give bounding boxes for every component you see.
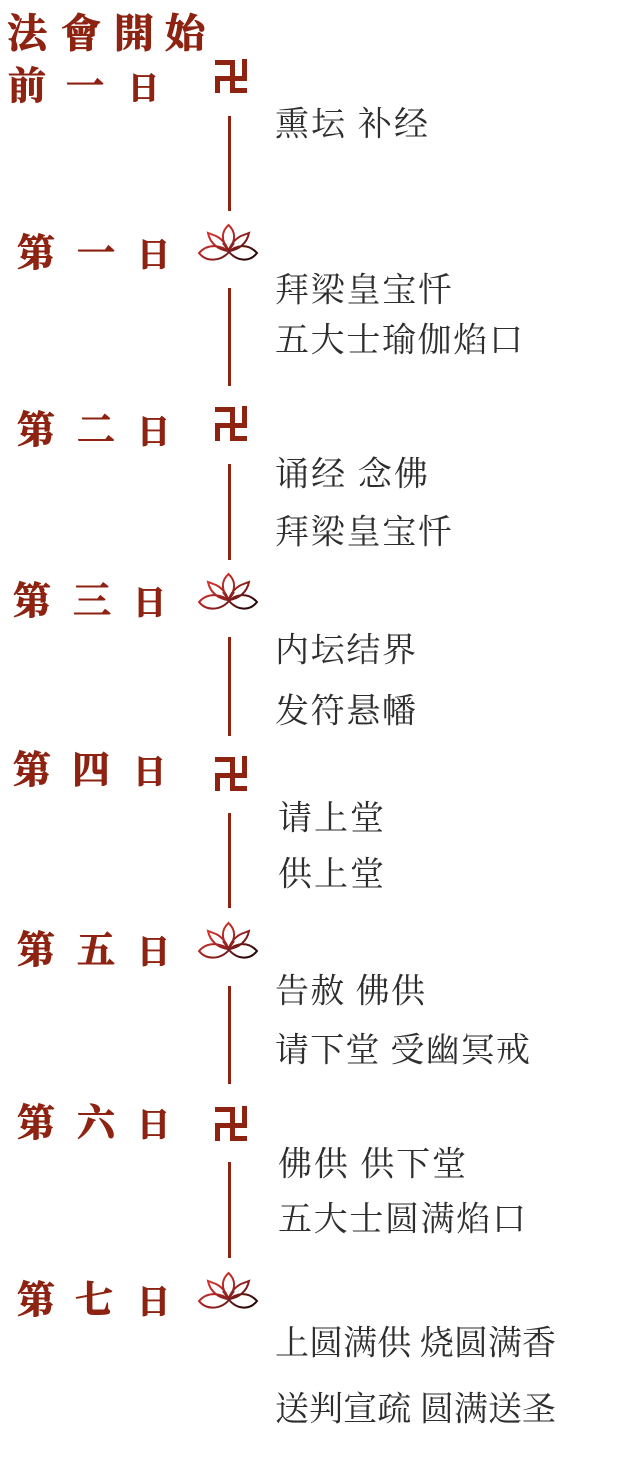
day label: 第一日: 一 — [77, 233, 115, 275]
day label: 第六日: 六 — [77, 1103, 118, 1145]
icon: lotus — [199, 923, 257, 958]
connector line — [228, 637, 231, 736]
day label: 第二日: 二 — [77, 410, 115, 452]
activity: 诵经 念佛: 诵经 念佛 — [275, 456, 428, 494]
activity: 请上堂: 请上堂 — [278, 800, 384, 838]
icon: lotus — [199, 1273, 257, 1308]
day label: 第三日: 日 — [133, 586, 166, 622]
day label: 前一日: 日 — [128, 71, 159, 106]
activity: 佛供 供下堂: 佛供 供下堂 — [278, 1146, 466, 1184]
day label: 第六日: 第 — [17, 1103, 55, 1145]
day label: 第四日: 第 — [13, 750, 51, 792]
connector line — [228, 288, 231, 386]
activity: 五大士瑜伽焰口: 五大士瑜伽焰口 — [275, 322, 523, 360]
icon: swastika — [215, 756, 247, 791]
activity: 发符悬幡: 发符悬幡 — [275, 692, 416, 730]
day label: 第二日: 第 — [17, 410, 55, 452]
day label: 第七日: 日 — [137, 1285, 170, 1321]
activity: 供上堂: 供上堂 — [278, 856, 384, 894]
day label: 第四日: 四 — [72, 750, 110, 792]
connector line — [228, 986, 231, 1084]
day label: 前一日: 一 — [66, 66, 104, 108]
day label: 第一日: 第 — [17, 233, 55, 275]
day label: 第三日: 第 — [13, 581, 51, 623]
activity: 请下堂 受幽冥戒: 请下堂 受幽冥戒 — [275, 1032, 530, 1070]
day label: 第五日: 日 — [137, 935, 170, 971]
day label: 第五日: 第 — [17, 930, 55, 972]
icon: lotus — [199, 225, 257, 260]
day label: 第一日: 日 — [137, 238, 170, 274]
activity: 告赦 佛供: 告赦 佛供 — [275, 972, 426, 1010]
icon: lotus — [199, 574, 257, 609]
connector line — [228, 116, 231, 211]
day label: 第七日: 七 — [75, 1280, 113, 1322]
activity: 五大士圆满焰口: 五大士圆满焰口 — [278, 1200, 526, 1238]
day label: 第二日: 日 — [137, 415, 170, 451]
activity: 送判宣疏 圆满送圣: 送判宣疏 圆满送圣 — [275, 1390, 556, 1428]
day label: 第七日: 第 — [17, 1280, 55, 1322]
connector line — [228, 813, 231, 908]
activity: 熏坛 补经: 熏坛 补经 — [275, 106, 428, 144]
activity: 拜梁皇宝忏: 拜梁皇宝忏 — [275, 272, 452, 310]
day label: 前一日: 前 — [8, 66, 46, 108]
connector line — [228, 1162, 231, 1258]
day label: 第四日: 日 — [133, 755, 166, 791]
activity: 拜梁皇宝忏: 拜梁皇宝忏 — [275, 514, 452, 552]
activity: 内坛结界: 内坛结界 — [275, 632, 416, 670]
icon: swastika — [215, 1106, 247, 1141]
connector line — [228, 464, 231, 560]
day label: 第五日: 五 — [77, 930, 115, 972]
icon: swastika — [215, 59, 247, 93]
title: 法會開始: 法會開始 — [7, 11, 208, 56]
activity: 上圆满供 烧圆满香: 上圆满供 烧圆满香 — [275, 1324, 556, 1362]
day label: 第六日: 日 — [137, 1108, 170, 1144]
icon: swastika — [215, 406, 247, 441]
day label: 第三日: 三 — [73, 581, 111, 623]
